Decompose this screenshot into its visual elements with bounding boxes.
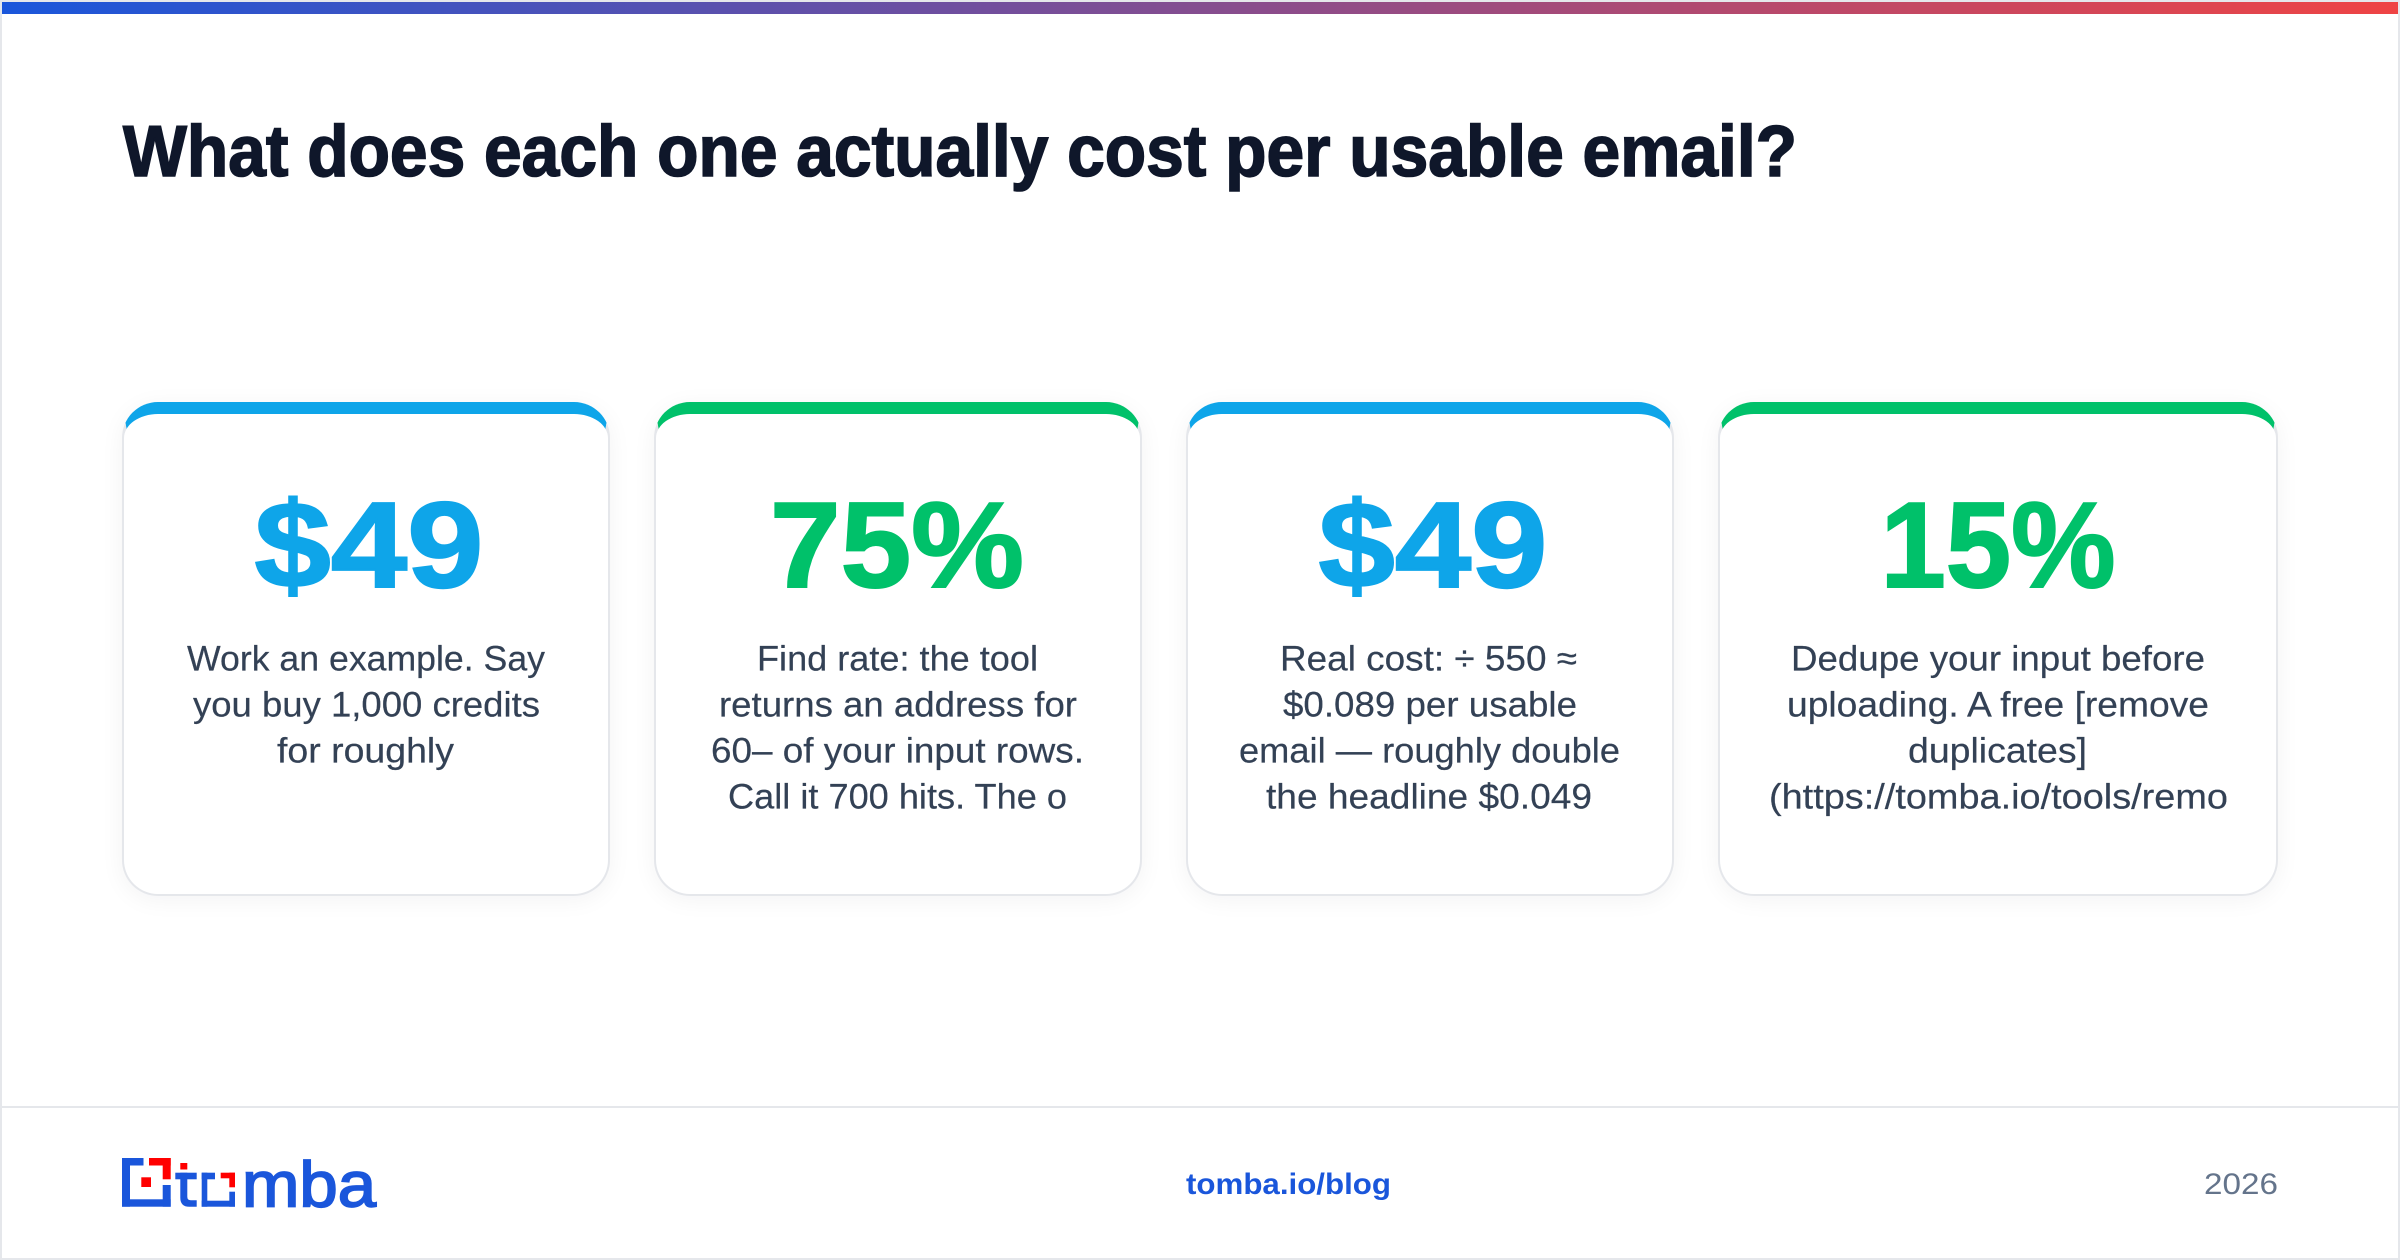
card 3 description: Real cost: ÷ 550 ≈ xyxy=(1280,638,1577,678)
panel: card 4 xyxy=(1718,402,2278,896)
card 1 description xyxy=(187,638,545,770)
card 3 description: $0.089 per usable xyxy=(1283,684,1577,724)
card 4 description xyxy=(1769,638,2228,816)
icon: logo letter t xyxy=(175,1163,197,1207)
card 2 description: returns an address for xyxy=(719,684,1077,724)
card 4 description: duplicates] xyxy=(1908,730,2087,770)
icon: logo letter o xyxy=(202,1173,235,1207)
card 1 description: for roughly xyxy=(277,730,454,770)
title: What does each one actually cost per usable email? xyxy=(123,111,1797,192)
footer link: tomba.io/blog xyxy=(1186,1168,1391,1201)
panel: card 2 xyxy=(654,402,1142,896)
stat: $49: $49 xyxy=(1318,477,1548,613)
panel: card 3 xyxy=(1186,402,1674,896)
logo wordmark: mba xyxy=(242,1149,376,1221)
card 3 description: email — roughly double xyxy=(1239,730,1620,770)
card 4 description: (https://tomba.io/tools/remo xyxy=(1769,776,2228,816)
stat: $49: $49 xyxy=(254,477,484,613)
logo: tomba xyxy=(122,1149,376,1221)
card 1 description: you buy 1,000 credits xyxy=(193,684,540,724)
footer xyxy=(2,1106,2398,1258)
card 2 description: Call it 700 hits. The o xyxy=(728,776,1067,816)
stat: 15%: 15% xyxy=(1880,477,2116,613)
stat: 75%: 75% xyxy=(770,477,1024,613)
card 2 description: 60– of your input rows. xyxy=(711,730,1084,770)
card 2 description xyxy=(711,638,1084,816)
card 4 description: Dedupe your input before xyxy=(1791,638,2205,678)
panel: card 1 xyxy=(122,402,610,896)
card 1 description: Work an example. Say xyxy=(187,638,545,678)
card 4 description: uploading. A free [remove xyxy=(1787,684,2209,724)
card 3 description xyxy=(1239,638,1620,816)
card 3 description: the headline $0.049 xyxy=(1266,776,1592,816)
footer year: 2026 xyxy=(2204,1168,2278,1201)
top gradient bar xyxy=(2,2,2398,14)
card 2 description: Find rate: the tool xyxy=(757,638,1038,678)
icon: logo square mark xyxy=(122,1158,171,1207)
